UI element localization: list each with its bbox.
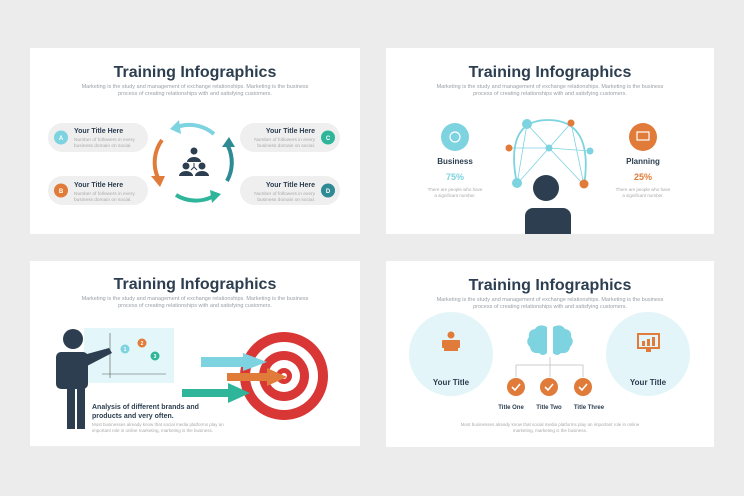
analysis text: important role in online marketing, marketing is the business.: [92, 428, 213, 433]
planning stat: 25%: [634, 172, 652, 182]
business stat: a significant number.: [434, 193, 476, 198]
subtitle: Marketing is the study and management of exchange relationships. Marketing is the business: [82, 84, 309, 90]
subtitle: Marketing is the study and management of exchange relationships. Marketing is the business: [82, 296, 309, 302]
checks: Title Two: [536, 405, 562, 411]
pill D: [240, 176, 340, 205]
subtitle: [437, 84, 664, 97]
panel: brain: [386, 261, 714, 447]
title: Training Infographics: [114, 276, 276, 293]
pill C: business domain on social.: [257, 143, 315, 149]
pill A: Number of followers in every: [74, 137, 135, 143]
checks: [498, 378, 605, 411]
analysis text: Most businesses already know that social media platforms play an: [92, 422, 224, 427]
pill A: [48, 123, 148, 152]
pill C: C: [326, 136, 331, 142]
panel: cycle: [30, 48, 360, 234]
subtitle: [82, 84, 309, 97]
title: Training Infographics: [469, 64, 631, 81]
left circle: Your Title: [433, 378, 470, 387]
subtitle: process of creating relationships with and satisfying customers.: [118, 91, 272, 97]
title: Training Infographics: [469, 277, 631, 294]
subtitle: process of creating relationships with and satisfying customers.: [118, 303, 272, 309]
analysis text: Analysis of different brands and: [92, 404, 199, 411]
subtitle: Marketing is the study and management of exchange relationships. Marketing is the business: [437, 84, 664, 90]
pill D: Number of followers in every: [254, 191, 316, 197]
pill A: A: [59, 136, 64, 142]
footer text: [461, 422, 640, 433]
panel: network: [386, 48, 714, 234]
checks: Title Three: [574, 405, 605, 411]
chart board: 2: [141, 341, 144, 347]
planning stat: a significant number.: [622, 193, 664, 198]
cycle arrows: [151, 120, 235, 203]
panel: target: [30, 261, 360, 446]
pill B: B: [59, 189, 64, 195]
pill C: [240, 123, 340, 152]
pill D: Your Title Here: [266, 182, 315, 189]
pill D: D: [326, 189, 331, 195]
brain icon: [527, 325, 573, 355]
subtitle: [82, 296, 309, 309]
subtitle: [437, 297, 664, 310]
business stat: There are people who have: [428, 187, 483, 192]
right circle: Your Title: [630, 378, 667, 387]
network arc: [506, 119, 594, 188]
pill D: business domain on social.: [257, 197, 315, 203]
pill B: [48, 176, 148, 205]
chart board: 1: [124, 347, 127, 353]
person silhouette: [525, 175, 571, 234]
left circle: [409, 312, 493, 396]
pill C: Your Title Here: [266, 128, 315, 135]
pill B: business domain on social.: [74, 197, 132, 203]
subtitle: process of creating relationships with and satisfying customers.: [473, 304, 627, 310]
pill B: Number of followers in every: [74, 191, 135, 197]
planning stat: There are people who have: [616, 187, 671, 192]
icon: team: [179, 148, 209, 176]
footer text: marketing, marketing is the business.: [513, 428, 587, 433]
checks: Title One: [498, 405, 524, 411]
presenter figure: [56, 329, 112, 429]
subtitle: Marketing is the study and management of exchange relationships. Marketing is the business: [437, 297, 664, 303]
chart board: 3: [154, 354, 157, 360]
pill B: Your Title Here: [74, 182, 123, 189]
planning stat: [616, 123, 671, 198]
chart board: [84, 328, 174, 383]
right circle: [606, 312, 690, 396]
business stat: Business: [437, 157, 473, 166]
footer text: Most businesses already know that social media platforms play an important role in online: [461, 422, 640, 427]
pill C: Number of followers in every: [254, 137, 316, 143]
business stat: 75%: [446, 172, 464, 182]
connector lines: [516, 357, 583, 377]
arrows: [182, 353, 287, 403]
pill A: Your Title Here: [74, 128, 123, 135]
title: Training Infographics: [114, 64, 276, 81]
target: [240, 332, 328, 420]
business stat: [428, 123, 483, 198]
analysis text: [92, 404, 224, 433]
analysis text: products and very often.: [92, 413, 174, 420]
subtitle: process of creating relationships with and satisfying customers.: [473, 91, 627, 97]
pill A: business domain on social.: [74, 143, 132, 149]
planning stat: Planning: [626, 157, 660, 166]
